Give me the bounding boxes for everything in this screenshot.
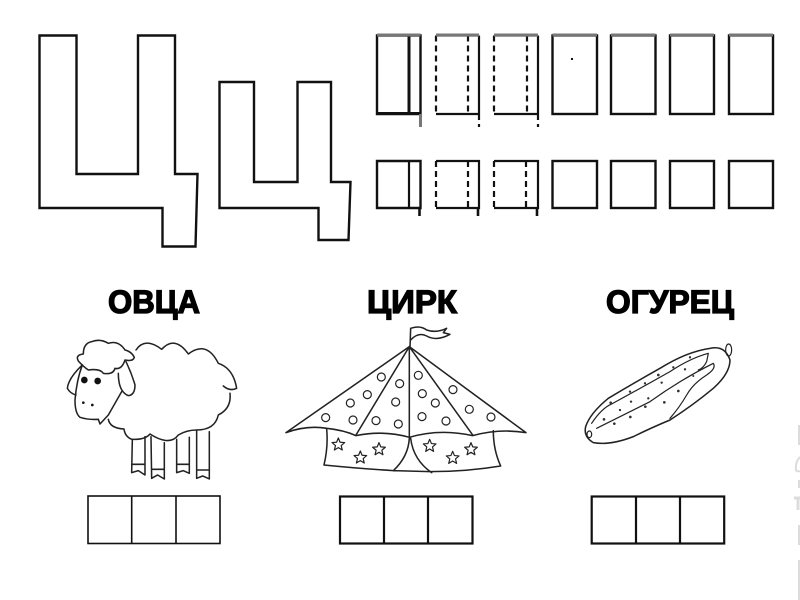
heading: ЦИРК: ЦИРК [367, 284, 457, 320]
heading: ОГУРЕЦ: ОГУРЕЦ [606, 284, 735, 320]
tracing row: capital letters [377, 35, 773, 127]
faint edge marks [794, 425, 800, 600]
icon: cucumber [585, 344, 732, 443]
icon: circus tent [286, 327, 526, 473]
lowercase letter ц outline [220, 82, 350, 240]
answer boxes: ОГУРЕЦ [592, 496, 724, 544]
tracing row: lowercase letters [377, 161, 773, 216]
capital letter Ц outline [40, 36, 198, 246]
answer boxes: ЦИРК [340, 496, 472, 544]
icon: sheep [67, 340, 237, 479]
heading: ОВЦА: ОВЦА [108, 284, 200, 320]
answer boxes: ОВЦА [88, 496, 220, 544]
